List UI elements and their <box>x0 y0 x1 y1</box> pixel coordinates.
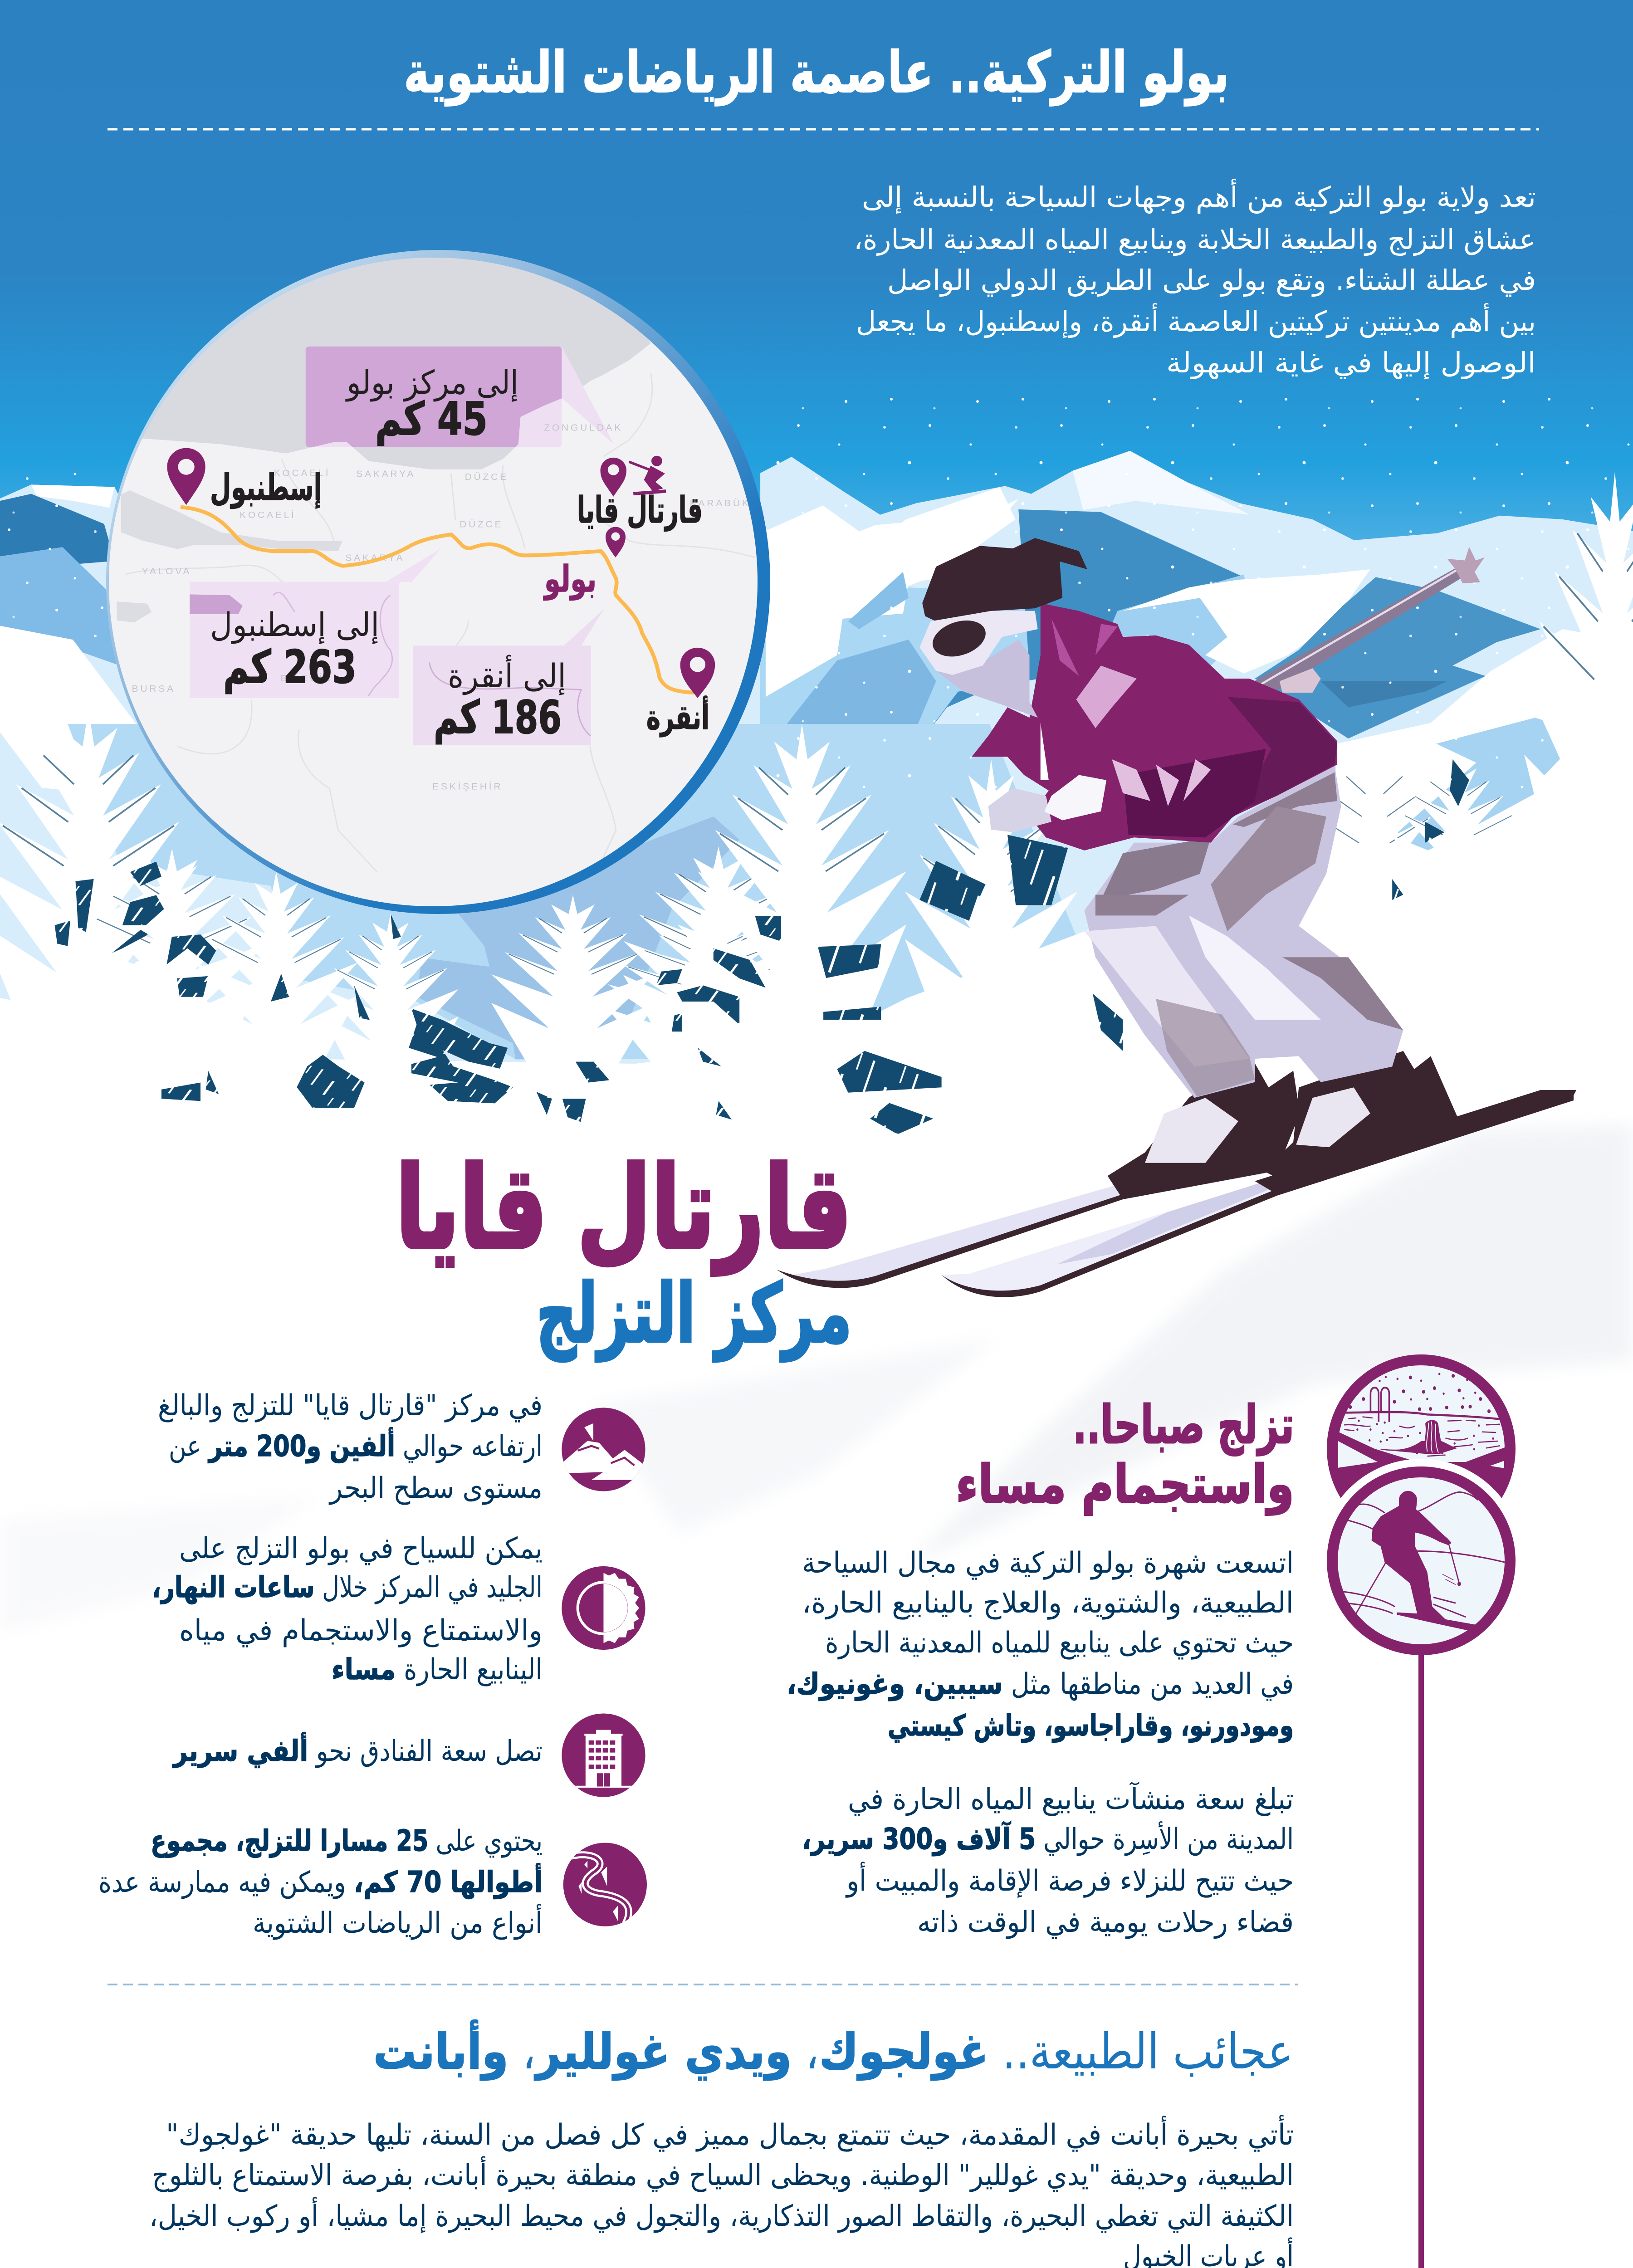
heading: Kartalkaya: قارتال قايا <box>396 1142 852 1275</box>
place labels on base map: KOCAELİ <box>240 510 296 520</box>
map labels <box>210 363 709 744</box>
icon: day and evening <box>562 1566 645 1650</box>
snowy ground <box>0 816 1633 1361</box>
map labels: إسطنبول <box>210 466 322 509</box>
heading: ski in the morning: واستجمام مساء <box>956 1454 1294 1515</box>
map labels: إلى إسطنبول <box>210 606 379 644</box>
text block: thermal capacity: حيث تتيح للنزلاء فرصة الإقامة والمبيت أو <box>845 1862 1294 1898</box>
pin: Kartalkaya <box>601 458 626 497</box>
intro paragraph: عشاق التزلج والطبيعة الخلابة وينابيع المياه المعدنية الحارة، <box>854 223 1536 256</box>
map labels: أنقرة <box>646 695 709 737</box>
place labels on base map: BURSA <box>132 684 176 694</box>
fact 1 text <box>158 1389 543 1505</box>
intro paragraph: تعد ولاية بولو التركية من أهم وجهات السياحة بالنسبة إلى <box>862 179 1536 214</box>
ski boots <box>1108 1051 1458 1199</box>
fact 2 text: الينابيع الحارة مساء <box>332 1653 543 1686</box>
place labels on base map: YALOVA <box>142 566 191 577</box>
text block: thermal fame: ومودورنو، وقاراجاسو، وتاش كيستي <box>888 1709 1294 1743</box>
section divider <box>108 1984 1298 1985</box>
text block: thermal fame <box>787 1546 1294 1743</box>
mountain scene <box>0 381 1633 1633</box>
place labels on base map: SAKARYA <box>356 469 416 479</box>
icon: hotel <box>556 1713 650 1797</box>
place labels on base map: SAKARYA <box>345 553 405 563</box>
pin: Istanbul <box>167 448 205 505</box>
ski back <box>777 1159 1266 1288</box>
place labels on base map: KOCAELİ <box>274 468 330 478</box>
lower blue valley behind trees <box>68 724 1094 1060</box>
face <box>936 640 1038 718</box>
fact 4 text: أطوالها 70 كم، ويمكن فيه ممارسة عدة <box>98 1863 543 1899</box>
heading: natural wonders: عجائب الطبيعة.. غولجوك، ويدي غوللير، وأبانت <box>373 2020 1293 2081</box>
icon: ski run <box>563 1843 647 1926</box>
text block: natural wonders: الطبيعية، وحديقة "يدي غوللير" الوطنية. ويحظى السياح في منطقة بحيرة أبانت، بفرصة الاستمتاع بالثلوج <box>152 2156 1294 2192</box>
title: بولو التركية.. عاصمة الرياضات الشتوية <box>404 39 1229 106</box>
fact 3 text: تصل سعة الفنادق نحو ألفي سرير <box>172 1732 543 1768</box>
fact 2 text: يمكن للسياح في بولو التزلج على <box>179 1532 543 1565</box>
skier illustration <box>777 538 1576 1297</box>
place labels on base map: DÜZCE <box>460 519 503 529</box>
text block: natural wonders: الكثيفة التي تغطي البحيرة، والتقاط الصور التذكارية، والتجول في محيط البحيرة إما مشيا، أو ركوب الخيل، <box>149 2197 1294 2233</box>
map labels: 186 كم <box>434 691 562 744</box>
intro paragraph <box>854 179 1536 380</box>
title divider <box>108 128 1539 131</box>
ski scene <box>1342 1491 1506 1631</box>
text block: thermal capacity <box>802 1781 1294 1939</box>
map base <box>117 258 755 873</box>
fir trees <box>0 472 1633 1095</box>
icon: skier on map <box>629 456 666 494</box>
gloves and sleeve <box>988 775 1106 832</box>
place labels on base map <box>132 423 751 792</box>
map labels: إلى مركز بولو <box>345 363 518 402</box>
heading: ski in the morning <box>956 1394 1294 1515</box>
fact 2 text: الجليد في المركز خلال ساعات النهار، <box>152 1571 543 1604</box>
heading: ski in the morning: تزلج صباحا.. <box>1073 1394 1294 1456</box>
intro paragraph: في عطلة الشتاء. وتقع بولو على الطريق الدولي الواصل <box>887 264 1536 297</box>
place labels on base map: ZONGULDAK <box>544 423 623 433</box>
place labels on base map: KARABÜK <box>690 498 751 508</box>
place labels on base map: BİLECİK <box>281 673 332 684</box>
panel: route map <box>91 230 770 914</box>
fact 2 text: والاستمتاع والاستجمام في مياه <box>179 1614 543 1647</box>
fact 4 text: أنواع من الرياضات الشتوية <box>253 1904 543 1940</box>
text block: thermal fame: في العديد من مناطقها مثل سيبين، وغونيوك، <box>787 1667 1294 1701</box>
map labels: 263 كم <box>223 640 357 694</box>
text block: natural wonders <box>149 2115 1294 2268</box>
map labels: إلى أنقرة <box>448 655 566 695</box>
text block: thermal fame: الطبيعية، والشتوية، والعلاج بالينابيع الحارة، <box>802 1586 1294 1620</box>
text block: thermal capacity: المدينة من الأسِرة حوالي 5 آلاف و300 سرير، <box>802 1821 1294 1856</box>
place labels on base map: ESKİŞEHİR <box>432 782 503 792</box>
text block: thermal fame: حيث تحتوي على ينابيع للمياه المعدنية الحارة <box>825 1626 1294 1660</box>
icon: pool and skier badge <box>1319 1360 1523 1663</box>
place labels on base map: DÜZCE <box>465 472 508 482</box>
fact 4 text <box>98 1824 543 1940</box>
callout: to Ankara <box>413 609 604 745</box>
fact 1 text: في مركز "قارتال قايا" للتزلج والبالغ <box>158 1389 543 1422</box>
text block: thermal capacity: قضاء رحلات يومية في الوقت ذاته <box>917 1906 1294 1939</box>
callout: to Bolu centre <box>91 230 651 469</box>
text block: thermal capacity: تبلغ سعة منشآت ينابيع المياه الحارة في <box>848 1781 1294 1816</box>
pants <box>1085 764 1403 1098</box>
ski front <box>942 1090 1576 1297</box>
wispy snow texture <box>0 1125 1633 1633</box>
fact 4 text: يحتوي على 25 مسارا للتزلج، مجموع <box>151 1824 543 1858</box>
fact 2 text <box>152 1532 543 1686</box>
map labels: 45 كم <box>375 392 488 446</box>
pin: Ankara <box>680 648 715 698</box>
fact 1 text: ارتفاعه حوالي ألفين و200 متر عن <box>169 1427 543 1463</box>
text block: natural wonders: تأتي بحيرة أبانت في المقدمة، حيث تتمتع بجمال مميز في كل فصل من السنة، تليها حديقة "غولجوك" <box>166 2115 1294 2152</box>
heading: ski centre: مركز التزلج <box>536 1266 852 1362</box>
dark tree shadows <box>55 759 1469 1134</box>
icon: mountain <box>558 1408 646 1491</box>
callout: to Istanbul <box>190 549 440 698</box>
goggles <box>919 611 1038 675</box>
falling snow dots <box>771 381 1633 789</box>
sky gradient <box>0 0 1633 544</box>
pool scene <box>1334 1373 1508 1505</box>
ski pole <box>1222 547 1485 711</box>
jacket <box>972 603 1337 850</box>
map labels: قارتال قايا <box>577 489 703 532</box>
hair <box>922 538 1087 621</box>
text block: thermal fame: اتسعت شهرة بولو التركية في مجال السياحة <box>802 1546 1294 1580</box>
pin: Bolu <box>606 527 626 557</box>
map labels: بولو <box>543 558 596 601</box>
fact 1 text: مستوى سطح البحر <box>328 1471 543 1505</box>
intro paragraph: بين أهم مدينتين تركيتين العاصمة أنقرة، وإسطنبول، ما يجعل <box>856 303 1536 338</box>
intro paragraph: الوصول إليها في غاية السهولة <box>1166 346 1536 380</box>
timeline connector <box>1418 1655 1424 2268</box>
route line <box>181 507 694 693</box>
